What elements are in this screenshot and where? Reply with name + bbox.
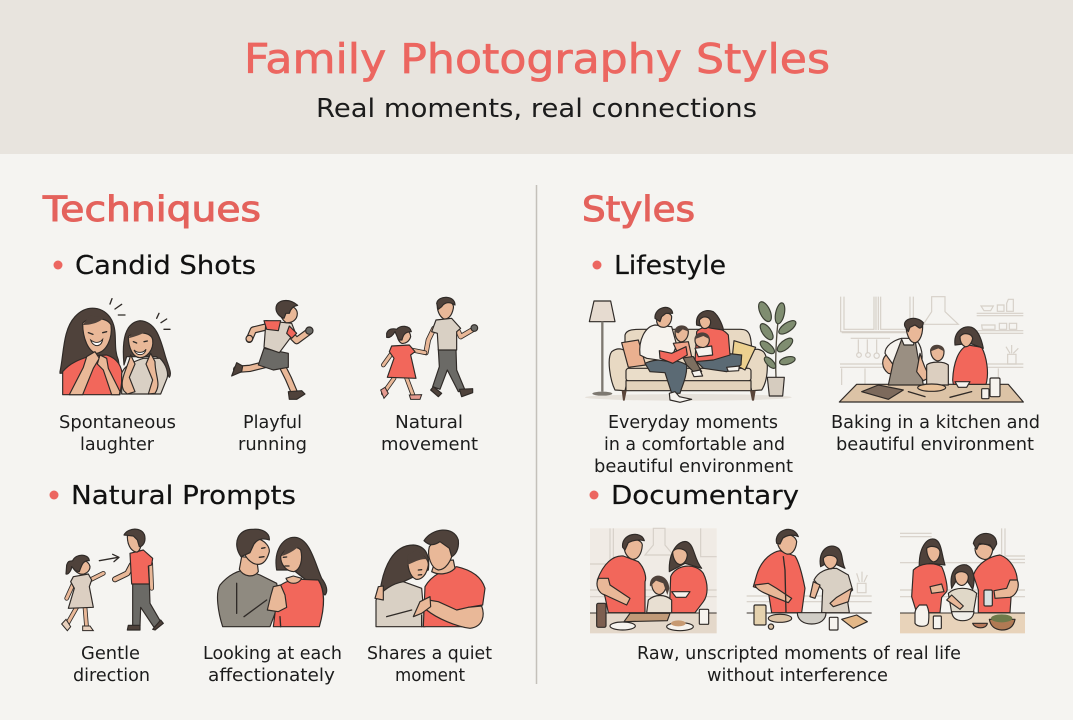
- caption: baking in a kitchen: beautiful environment: [836, 435, 1034, 455]
- caption: looking at each other affectionately: Looking at each: [203, 644, 342, 664]
- caption: natural movement: Natural: [395, 413, 463, 433]
- icon: two women laughing: [60, 299, 170, 395]
- header band: [0, 0, 1073, 154]
- caption: everyday moments: [594, 413, 793, 477]
- heading: styles: Styles: [582, 190, 695, 230]
- subheading: natural prompts: Natural Prompts: [71, 481, 296, 511]
- caption: raw unscripted moments: [637, 644, 961, 686]
- illustration: documentary scene one: [590, 528, 717, 633]
- caption: raw unscripted moments: Raw, unscripted moments of real life: [637, 644, 961, 664]
- caption: spontaneous laughter: Spontaneous: [59, 413, 176, 433]
- caption: everyday moments: beautiful environment: [594, 457, 793, 477]
- caption: playful running: Playful: [243, 413, 302, 433]
- panel: styles: [582, 190, 1040, 686]
- caption: shares a quiet moment: [367, 644, 492, 686]
- caption: gentle direction: Gentle: [81, 644, 140, 664]
- subheading: candid shots: Candid Shots: [75, 251, 256, 281]
- panel: techniques: [42, 190, 492, 686]
- illustration: documentary scene two: [747, 529, 872, 630]
- caption: shares a quiet moment: Shares a quiet: [367, 644, 492, 664]
- caption: baking in a kitchen: [831, 413, 1040, 455]
- subtitle: Real moments, real connections: [316, 94, 757, 124]
- illustration: baking in a kitchen: [839, 297, 1023, 402]
- caption: natural movement: movement: [381, 435, 478, 455]
- caption: everyday moments: Everyday moments: [608, 413, 778, 433]
- caption: playful running: [238, 413, 307, 455]
- title: Family Photography Styles: [244, 35, 830, 83]
- icon: gentle direction: [62, 529, 163, 631]
- caption: gentle direction: direction: [73, 666, 150, 686]
- subheading: lifestyle: Lifestyle: [614, 251, 726, 281]
- icon: looking at each other: [217, 529, 327, 627]
- caption: spontaneous laughter: [59, 413, 176, 455]
- caption: natural movement: [381, 413, 478, 455]
- caption: baking in a kitchen: Baking in a kitchen and: [831, 413, 1040, 433]
- illustration: documentary scene three: [900, 528, 1025, 633]
- icon: sharing a quiet moment: [375, 530, 485, 628]
- subheading: documentary: Documentary: [611, 481, 799, 511]
- caption: looking at each other affectionately: affectionately: [208, 666, 335, 686]
- icon: playful running: [232, 301, 313, 399]
- heading: techniques: Techniques: [42, 190, 261, 230]
- caption: shares a quiet moment: moment: [395, 666, 465, 686]
- icon: natural movement: [381, 297, 478, 399]
- illustration: family reading on sofa: [585, 300, 798, 402]
- caption: playful running: running: [238, 435, 307, 455]
- caption: gentle direction: [73, 644, 150, 686]
- caption: spontaneous laughter: laughter: [80, 435, 155, 455]
- caption: looking at each other affectionately: [203, 644, 342, 686]
- caption: everyday moments: in a comfortable and: [604, 435, 785, 455]
- caption: raw unscripted moments: without interference: [707, 666, 888, 686]
